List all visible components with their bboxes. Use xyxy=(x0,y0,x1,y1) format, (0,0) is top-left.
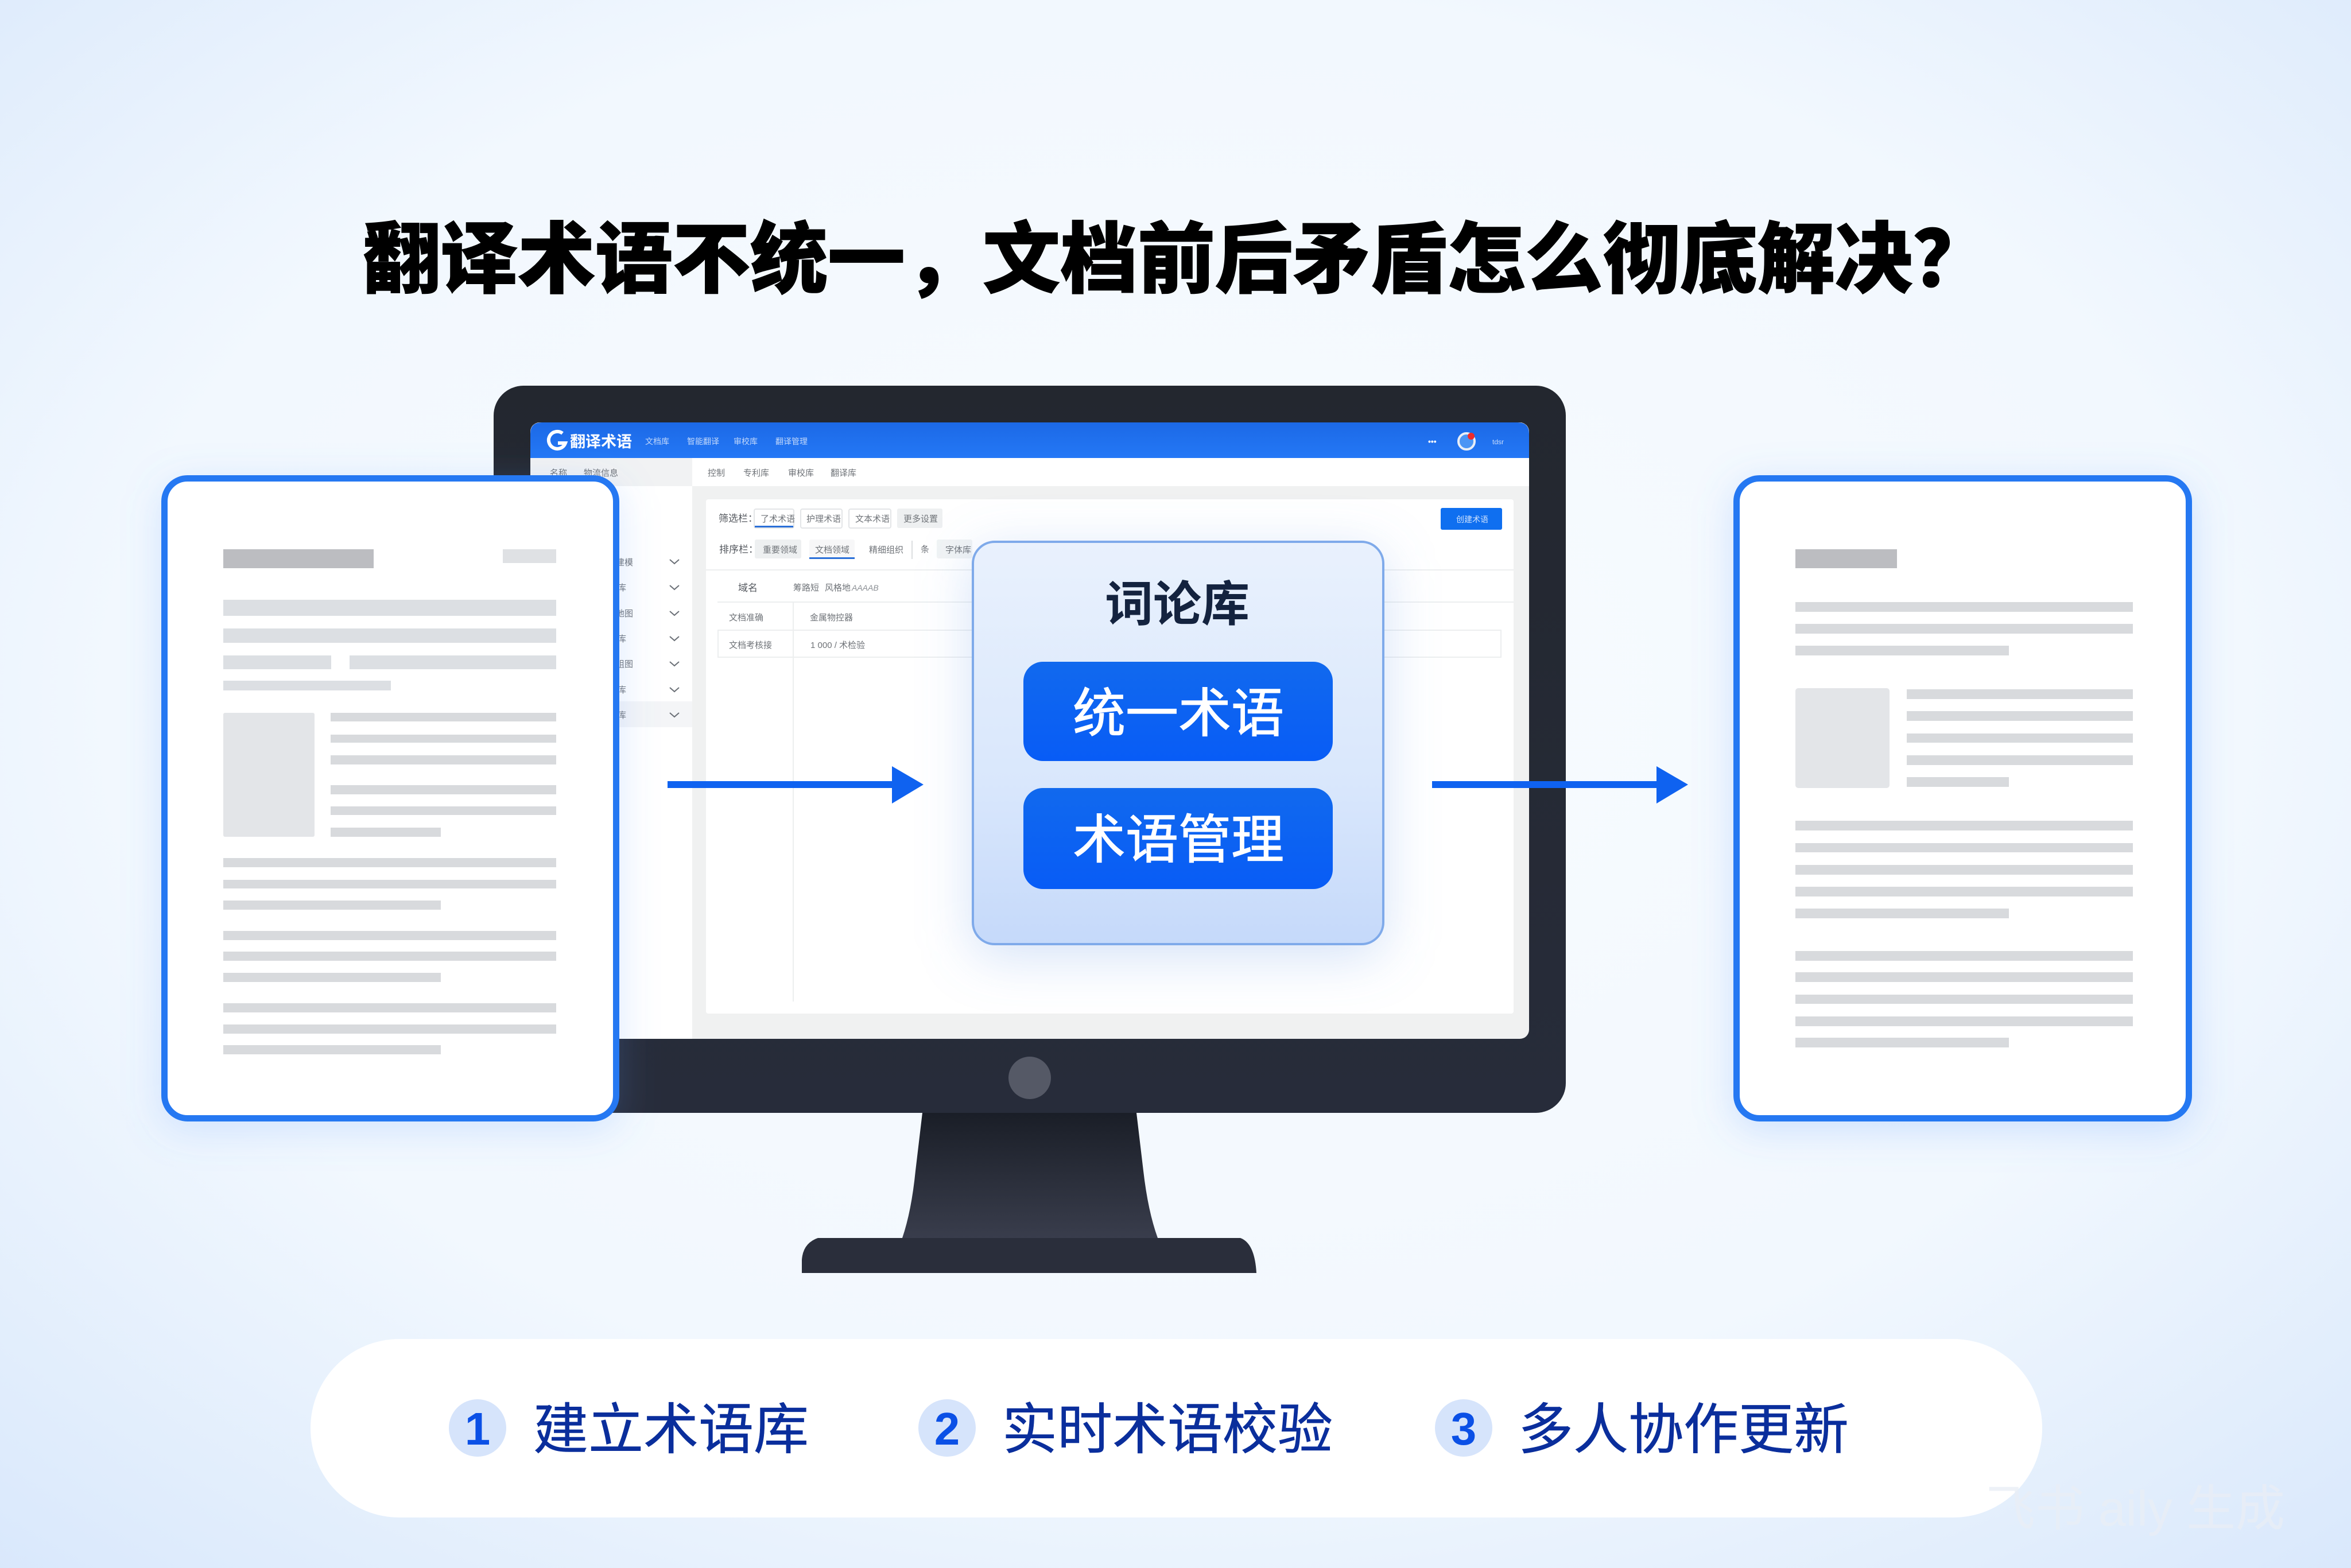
sidebar fill xyxy=(530,486,692,1039)
filter row 2: 条 xyxy=(921,545,929,554)
filter row 2: 文档领域 xyxy=(815,545,849,555)
screen xyxy=(530,422,1529,1039)
create button: 创建术语 xyxy=(1456,515,1488,524)
sidebar toolbar xyxy=(530,458,692,486)
toolbar row: 翻译库 xyxy=(831,468,856,478)
table rows: 1 000 / 术检验 xyxy=(810,641,865,650)
intro lines xyxy=(1795,602,2133,655)
sidebar labels: 术语库 xyxy=(600,634,626,644)
user label: tdsr xyxy=(1492,438,1504,446)
main toolbar xyxy=(692,458,1529,486)
nav items xyxy=(645,437,808,446)
more dots: ••• xyxy=(1428,437,1437,446)
top navigation bar xyxy=(530,422,1529,458)
document page xyxy=(164,479,616,1118)
nav items: 智能翻译 xyxy=(687,437,719,446)
step 2: 实时术语校验 xyxy=(1002,1399,1333,1461)
content panel xyxy=(706,499,1514,1014)
sidebar xyxy=(530,486,692,1039)
nav items: 文档库 xyxy=(645,437,669,446)
arrow: glossary to result xyxy=(1432,766,1688,804)
filter row 2 xyxy=(719,540,972,559)
sidebar labels: 术语地图 xyxy=(599,609,633,619)
filter row 1: 筛选栏： xyxy=(719,513,758,524)
create button xyxy=(1441,508,1502,530)
step 3: 多人协作更新 xyxy=(1518,1399,1849,1461)
paragraph lines xyxy=(1795,821,2133,1047)
title: 翻译术语不统一，文档前后矛盾怎么彻底解决？ xyxy=(363,216,1990,303)
card body xyxy=(973,542,1383,944)
pill background xyxy=(311,1339,2042,1517)
monitor stand xyxy=(902,1113,1158,1238)
sidebar labels: 术语建模 xyxy=(599,558,633,568)
table rows xyxy=(729,613,865,650)
sidebar labels: 术语库 xyxy=(600,583,626,593)
button: term management: 术语管理 xyxy=(1073,811,1284,870)
panel: glossary card xyxy=(972,542,1384,957)
sidebar labels xyxy=(599,558,633,720)
document title bar xyxy=(1795,549,1897,568)
sidebar labels: 术语库 xyxy=(600,711,626,720)
screen background xyxy=(530,422,1529,1039)
table header: 风格地 xyxy=(825,583,851,593)
toolbar row: 名称 xyxy=(550,468,567,478)
card shadow xyxy=(972,552,1384,957)
logo text: 翻译术语 xyxy=(570,433,632,451)
filter row 1: 护理术语 xyxy=(806,514,841,524)
chevrons xyxy=(670,560,679,717)
button: unify terms xyxy=(1023,662,1333,761)
toolbar row xyxy=(530,458,1529,486)
table rules xyxy=(706,569,1514,1002)
document title bar xyxy=(223,549,374,568)
sidebar labels: 术语组图 xyxy=(599,659,633,669)
document tag bar xyxy=(503,549,556,563)
image placeholder xyxy=(223,713,315,837)
nav items: 审校库 xyxy=(734,437,758,446)
filter row 2: 排序栏： xyxy=(719,544,758,555)
table header: AAAAB xyxy=(851,583,879,592)
avatar xyxy=(1458,433,1475,449)
table header: 域名 xyxy=(738,583,758,593)
step 1: 1 xyxy=(465,1403,490,1454)
step 3: 3 xyxy=(1451,1403,1476,1454)
header fill xyxy=(530,422,1529,458)
arrow: source to glossary xyxy=(668,766,924,804)
button: unify terms: 统一术语 xyxy=(1073,685,1284,743)
document page xyxy=(1737,479,2189,1118)
nav items: 翻译管理 xyxy=(775,437,808,446)
button: term management xyxy=(1023,788,1333,889)
document glow xyxy=(1733,484,2192,1130)
content fill xyxy=(706,499,1514,1014)
toolbar row: 控制 xyxy=(708,468,725,478)
intro lines xyxy=(223,600,556,690)
camera button xyxy=(1008,1057,1051,1099)
side lines xyxy=(1907,689,2133,787)
filter row 1: 了术术语 xyxy=(761,514,795,524)
sidebar labels: 术语库 xyxy=(600,685,626,695)
image placeholder xyxy=(1795,688,1890,788)
table rows: 金属物控器 xyxy=(810,613,853,623)
table header: 筹路短 xyxy=(793,583,819,593)
toolbar row: 物流信息 xyxy=(584,468,618,478)
step 2: 2 xyxy=(934,1403,960,1454)
filter row 1 xyxy=(719,509,942,528)
panel: unified document xyxy=(1733,479,2192,1130)
paragraph lines xyxy=(223,858,556,1054)
filter row 2: 重要领域 xyxy=(763,545,797,555)
filter row 1: 文本术语 xyxy=(855,514,890,524)
table rows: 文档考核接 xyxy=(729,641,772,650)
selected row xyxy=(619,701,692,727)
logo icon xyxy=(549,432,565,449)
filter row 1: 更多设置 xyxy=(903,514,938,524)
table xyxy=(706,569,1514,1002)
monitor base xyxy=(802,1238,1256,1273)
panel: source document xyxy=(161,479,619,1130)
table header xyxy=(738,583,879,593)
side lines xyxy=(331,713,556,837)
table rows: 文档准确 xyxy=(729,613,763,623)
monitor xyxy=(494,386,1566,1273)
toolbar row: 审校库 xyxy=(788,468,814,478)
filter row 2: 字体库 xyxy=(945,545,971,555)
step 1: 建立术语库 xyxy=(533,1399,809,1461)
document glow xyxy=(161,484,619,1130)
toolbar row: 专利库 xyxy=(743,468,769,478)
filter row 2: 精细组织 xyxy=(869,545,903,555)
monitor bezel xyxy=(494,386,1566,1113)
watermark: 飞书 aily 生成 xyxy=(1986,1481,2285,1536)
card heading: 词论库 xyxy=(1105,577,1250,631)
panel: steps pill xyxy=(311,1339,2042,1517)
